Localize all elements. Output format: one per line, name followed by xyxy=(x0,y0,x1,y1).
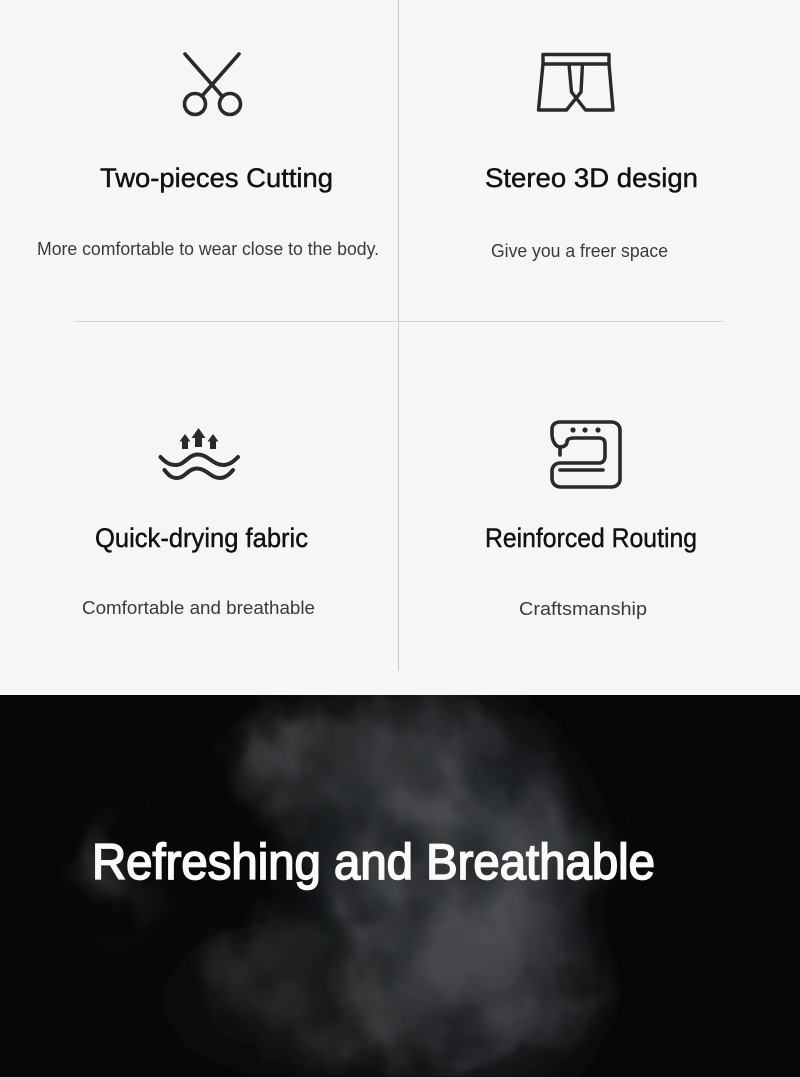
panel: reinforced routing xyxy=(485,422,697,619)
text: quick-drying description: Comfortable and breathable xyxy=(82,598,315,618)
smoke haze xyxy=(180,690,580,1077)
icon: rising moisture over waves xyxy=(160,428,238,478)
text: stereo description: Give you a freer space xyxy=(491,241,668,261)
heading: refreshing and breathable: Refreshing and Breathable xyxy=(92,834,655,890)
icon: shorts xyxy=(538,54,613,110)
smoke wisps xyxy=(105,700,600,1077)
text: reinforced routing description: Craftsmanship xyxy=(519,599,647,619)
vertical divider xyxy=(398,0,399,671)
icon: scissors xyxy=(184,54,240,114)
heading: two-pieces cutting: Two-pieces Cutting xyxy=(100,163,333,193)
panel: stereo 3d design xyxy=(485,54,698,261)
panel: features background xyxy=(0,0,800,695)
icon: sewing machine xyxy=(552,422,620,487)
heading: reinforced routing: Reinforced Routing xyxy=(485,523,697,553)
heading: quick-drying fabric: Quick-drying fabric xyxy=(95,523,308,553)
panel: quick-drying fabric xyxy=(82,428,315,618)
panel: refreshing and breathable xyxy=(0,690,800,1077)
panel: two-pieces cutting xyxy=(37,54,379,259)
text: two-pieces description: More comfortable to wear close to the body. xyxy=(37,239,379,259)
heading: stereo 3d design: Stereo 3D design xyxy=(485,163,698,193)
horizontal divider xyxy=(75,321,723,322)
